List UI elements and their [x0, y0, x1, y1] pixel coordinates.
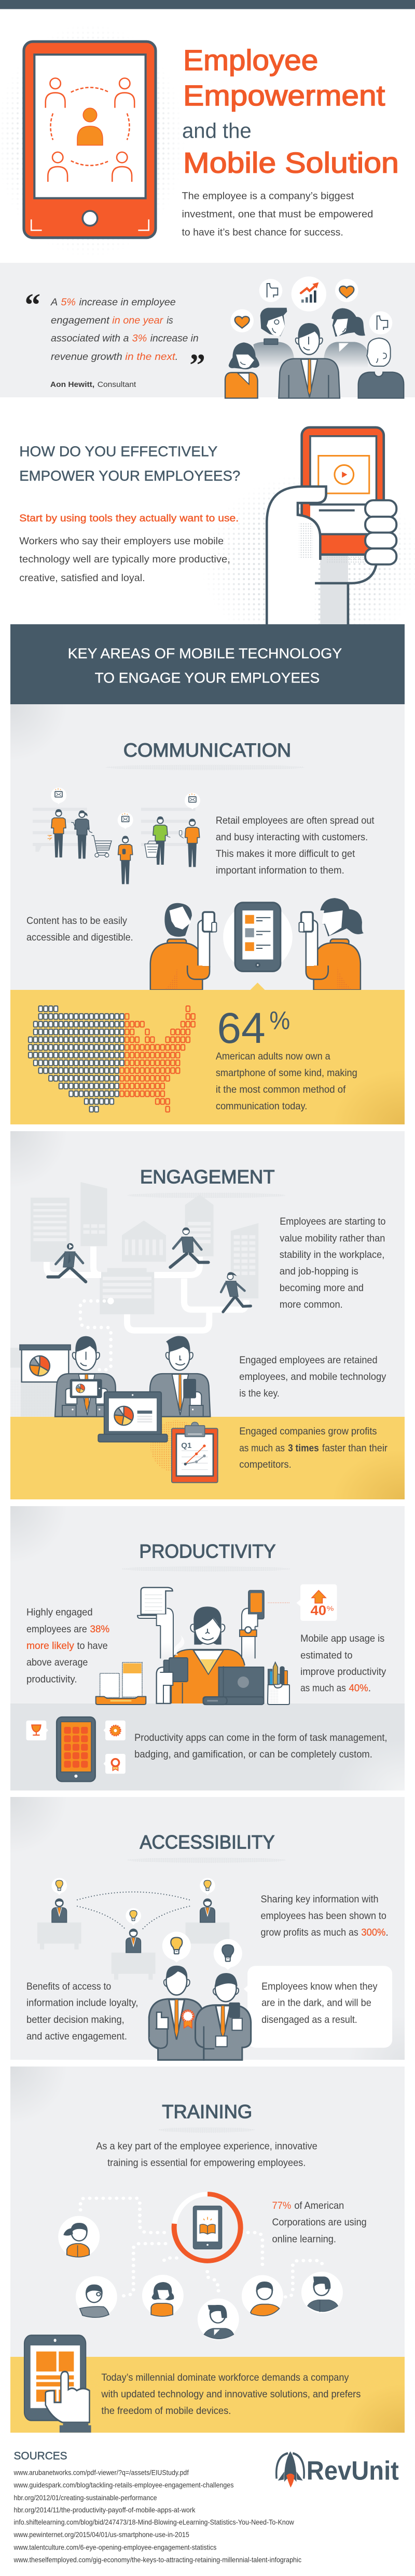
sources: SOURCES	[14, 2450, 67, 2462]
callout: in the dark: Employees know when they	[261, 1981, 378, 1992]
text: retained employees: is the key.	[239, 1388, 280, 1399]
text: profits: faster than their	[322, 1442, 388, 1454]
text: sharing information: Sharing key information with	[261, 1894, 379, 1905]
quote text: A	[50, 297, 58, 308]
body text	[19, 535, 230, 584]
text: 38 percent: employees are	[26, 1624, 87, 1635]
text: mobile app usage: estimated to	[300, 1649, 353, 1661]
text: profits: 3 times	[288, 1442, 319, 1454]
top bar	[0, 0, 415, 9]
quote text: increase in	[150, 333, 199, 344]
text: benefits: Benefits of access to	[26, 1981, 111, 1992]
text: content accessible: accessible and digestible.	[26, 932, 133, 943]
text: 38 percent: 38%	[90, 1624, 109, 1635]
text: profits: as much as	[239, 1442, 285, 1454]
quote text: 5%	[61, 297, 76, 308]
logo: RevUnit	[276, 2451, 399, 2488]
people with feedback bubbles	[225, 276, 404, 398]
text: profits: competitors.	[239, 1459, 292, 1470]
intro text: investment, one that must be empowered	[182, 208, 373, 220]
header section	[6, 37, 397, 245]
quote text: is	[167, 315, 173, 326]
orange subheading: Start by using tools they actually want to use.	[19, 513, 239, 524]
text: benefits: and active engagement.	[26, 2031, 127, 2042]
callout: in the dark: disengaged as a result.	[261, 2014, 357, 2025]
stat: 64 percent: smartphone of some kind, making	[216, 1067, 357, 1079]
text: benefits: information include loyalty,	[26, 1997, 138, 2009]
logo: RevUnit: RevUnit	[307, 2456, 399, 2485]
heading: engagement: ENGAGEMENT	[140, 1166, 275, 1188]
icon: clipboard with Q1 chart	[172, 1422, 218, 1483]
halftone dots behind tablet	[6, 37, 174, 245]
text: benefits: better decision making,	[26, 2014, 125, 2025]
text: mobile app usage: .	[368, 1683, 371, 1694]
sources: www.theselfemployed.com/gig-economy/the-keys-to-attracting-retaining-millennial-talent-infographic	[13, 2556, 301, 2564]
halftone dots behind hand	[213, 484, 411, 624]
key areas banner	[10, 624, 405, 704]
title: Empowerment	[183, 79, 385, 112]
text: profits: Engaged companies grow profits	[239, 1426, 377, 1437]
icon: tablet with connected people	[24, 42, 156, 238]
text: mobility: becoming more and	[280, 1282, 364, 1294]
heading: productivity	[122, 1540, 290, 1572]
text: sharing information	[261, 1894, 389, 1938]
text: mobility: value mobility rather than	[280, 1232, 385, 1244]
stat: 77 percent: online learning.	[272, 2233, 336, 2245]
text: mobility: stability in the workplace,	[280, 1249, 384, 1260]
two employees with light bulbs	[149, 1931, 251, 2060]
text: retained employees: employees, and mobile technology	[239, 1371, 386, 1383]
people reading a tablet	[150, 898, 364, 990]
text: mobility: more common.	[280, 1299, 343, 1310]
presenters with devices	[10, 1336, 218, 1483]
heading: productivity: PRODUCTIVITY	[139, 1540, 276, 1562]
heading: accessibility	[127, 1832, 286, 1863]
sources	[13, 2450, 301, 2564]
text: millennial workforce	[101, 2372, 361, 2417]
heading: communication	[106, 740, 305, 770]
text: training intro	[96, 2140, 317, 2168]
icon: pen cup	[268, 1662, 289, 1705]
title	[182, 44, 399, 179]
stat: 64 percent: %	[269, 1007, 290, 1035]
text: benefits	[26, 1981, 138, 2042]
text: content accessible	[26, 915, 133, 943]
quote text: Aon Hewitt,	[50, 381, 94, 389]
jumping employee 2	[170, 1227, 209, 1267]
body text: technology well are typically more productive,	[19, 554, 230, 565]
title: and the	[182, 118, 252, 142]
title: Employee	[183, 44, 318, 76]
key areas banner: TO ENGAGE YOUR EMPLOYEES	[95, 669, 320, 686]
sources: www.talentculture.com/6-eye-opening-employee-engagement-statistics	[13, 2544, 216, 2552]
text: training intro: training is essential for empowering employees.	[107, 2157, 306, 2168]
icon: clipboard with Q1 chart: Q1	[181, 1442, 191, 1450]
panel: productivity	[10, 1506, 405, 1791]
jumping employee 3	[221, 1272, 251, 1312]
text: mobile app usage: Mobile app usage is	[300, 1633, 384, 1644]
quote text: revenue growth	[51, 351, 122, 363]
text: training intro: As a key part of the employee experience, innovative	[96, 2140, 317, 2152]
text: mobile app usage: as much as	[300, 1683, 346, 1694]
heading: communication: COMMUNICATION	[123, 740, 291, 761]
heading: EMPOWER YOUR EMPLOYEES?	[19, 468, 240, 484]
text: retail employees: and busy interacting with customers.	[216, 831, 368, 843]
title: Mobile Solution	[183, 147, 399, 179]
city buildings and paths	[31, 1182, 258, 1370]
text: retained employees	[239, 1354, 386, 1399]
text: retained employees: Engaged employees are retained	[239, 1354, 378, 1366]
text: retail employees: important information to them.	[216, 865, 344, 876]
key areas banner: KEY AREAS OF MOBILE TECHNOLOGY	[68, 645, 342, 661]
text: productivity apps: Productivity apps can come in the form of task management,	[134, 1732, 387, 1743]
text: sharing information: .	[385, 1927, 389, 1938]
callout: in the dark	[244, 1966, 392, 2048]
callout: 40 percent	[296, 1585, 337, 1621]
heading: training: TRAINING	[162, 2101, 252, 2123]
sources: www.guidespark.com/blog/tackling-retails-employee-engagement-challenges	[13, 2481, 234, 2489]
text: sharing information: grow profits as much as	[261, 1927, 358, 1938]
intro text: The employee is a company’s biggest	[182, 191, 354, 202]
text: mobility: and job-hopping is	[280, 1266, 358, 1277]
stat: 77 percent	[272, 2200, 367, 2245]
jumping employee 1	[48, 1243, 86, 1282]
sources: info.shiftelearning.com/blog/bid/247473/18-Mind-Blowing-eLearning-Statistics-You-Need-To-Know	[14, 2518, 294, 2526]
text: retail employees: Retail employees are often spread out	[216, 815, 375, 826]
text: mobility: Employees are starting to	[280, 1216, 385, 1227]
panel: millennial workforce	[10, 2335, 405, 2433]
icon: paper tray	[96, 1662, 146, 1705]
text: retail employees	[216, 815, 375, 876]
sources: www.pewinternet.org/2015/04/01/us-smartphone-use-in-2015	[13, 2531, 189, 2539]
text: 38 percent: to have	[77, 1640, 108, 1652]
quote text: engagement	[51, 315, 110, 326]
text: 38 percent: more likely	[26, 1640, 74, 1652]
icon: laptop with pie chart	[98, 1392, 202, 1472]
quote text: 3%	[132, 333, 147, 344]
text: 38 percent: productivity.	[26, 1673, 77, 1685]
text: productivity apps: badging, and gamification, or can be completely custom.	[134, 1749, 372, 1760]
panel: engagement	[10, 1131, 405, 1417]
heading: engagement	[127, 1166, 286, 1198]
icon: tablet with touching hand	[24, 2335, 91, 2433]
text: millennial workforce: with updated technology and innovative solutions, and prefers	[101, 2389, 361, 2400]
chart: map of USA made of phones	[28, 1005, 196, 1113]
heading: accessibility: ACCESSIBILITY	[140, 1832, 275, 1853]
desks and sharing network	[37, 1878, 229, 1980]
quote text: in one year	[112, 315, 164, 326]
heading: training	[158, 2101, 255, 2132]
quote text: increase in employee	[79, 297, 176, 308]
text: millennial workforce: the freedom of mobile devices.	[101, 2405, 231, 2417]
multitasking employee at desk	[96, 1588, 290, 1705]
panel: quote	[0, 263, 415, 398]
panel: profits	[10, 1417, 405, 1499]
text: productivity apps	[134, 1732, 387, 1760]
section: how do you effectively empower	[19, 426, 411, 624]
callout: in the dark: are in the dark, and will be	[261, 1997, 371, 2009]
stat: 64 percent	[216, 1004, 357, 1112]
callout: 40 percent: 40	[310, 1604, 326, 1618]
text: retail employees: This makes it more difficult to get	[216, 848, 355, 860]
heading: HOW DO YOU EFFECTIVELY	[19, 444, 217, 460]
text: sharing information: 300%	[361, 1927, 385, 1938]
panel: communication	[10, 704, 405, 990]
chart: 77 percent ring with network of employees	[58, 2194, 343, 2340]
intro text	[182, 191, 373, 238]
text: 38 percent: above average	[26, 1657, 88, 1668]
text: mobile app usage	[300, 1633, 386, 1694]
text: mobile app usage: 40%	[349, 1683, 368, 1694]
panel: training	[10, 2067, 405, 2357]
quote text: ”	[189, 347, 205, 383]
quote text: associated with a	[51, 333, 129, 344]
quote text: .	[175, 351, 178, 363]
quote text	[24, 288, 205, 389]
sources: hbr.org/2012/01/creating-sustainable-performance	[14, 2494, 157, 2502]
heading	[19, 444, 240, 484]
intro text: to have it’s best chance for success.	[182, 227, 343, 238]
text: mobility	[280, 1216, 385, 1310]
sources: www.arubanetworks.com/pdf-viewer/?q=/assets/EIUStudy.pdf	[13, 2468, 189, 2476]
text: content accessible: Content has to be easily	[26, 915, 127, 927]
stat: 77 percent: 77%	[272, 2200, 291, 2211]
stat: 77 percent: Corporations are using	[272, 2217, 367, 2228]
icon: hand holding phone	[267, 427, 396, 624]
text: mobile app usage: improve productivity	[300, 1666, 386, 1678]
text: 38 percent	[26, 1607, 109, 1685]
retail store scene	[33, 787, 200, 884]
sources: hbr.org/2014/11/the-productivity-payoff-of-mobile-apps-at-work	[14, 2506, 196, 2514]
quote text: Consultant	[98, 381, 136, 389]
stat: 77 percent: of American	[294, 2200, 344, 2211]
quote text: “	[24, 288, 40, 323]
stat: 64 percent: American adults now own a	[216, 1051, 330, 1062]
text: millennial workforce: Today’s millennial dominate workforce demands a company	[101, 2372, 349, 2383]
text: profits	[239, 1426, 388, 1470]
text: sharing information: employees has been shown to	[261, 1910, 386, 1922]
stat: 64 percent: 64	[217, 1004, 266, 1052]
icon: tablet with app grid and badges	[26, 1717, 126, 1781]
stat: 64 percent: communication today.	[216, 1101, 307, 1112]
callout: 40 percent: %	[327, 1605, 334, 1613]
stat: 64 percent: it the most common method of	[216, 1084, 346, 1095]
panel: 64 percent	[10, 983, 405, 1124]
quote text: in the next	[125, 351, 176, 363]
panel: accessibility	[10, 1797, 405, 2060]
body text: creative, satisfied and loyal.	[19, 572, 145, 584]
text: 38 percent: Highly engaged	[26, 1607, 93, 1618]
body text: Workers who say their employers use mobile	[19, 535, 224, 547]
